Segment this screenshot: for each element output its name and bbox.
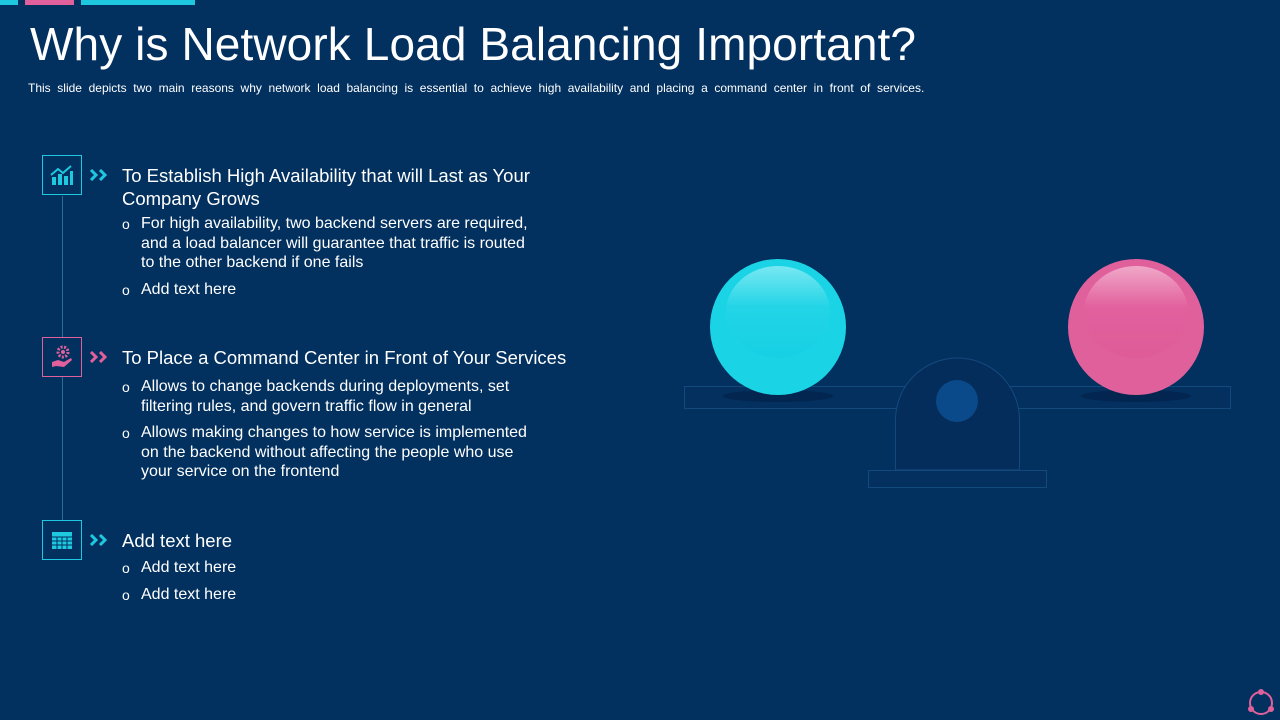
subtitle: This slide depicts two main reasons why network load balancing is essential to achieve high availability and placing a command center in front of services. [28, 81, 924, 95]
icon: growth chart [42, 155, 82, 195]
section 3: Add text here [141, 559, 236, 576]
arrow 1 [90, 169, 107, 181]
section 2 [122, 347, 566, 480]
heading 3: Add text here [122, 530, 232, 551]
section 3: o [122, 586, 130, 602]
icon: calendar [42, 520, 82, 560]
bullets 1: o [122, 216, 130, 232]
icon: hand gear [42, 337, 82, 377]
bullets 1: Add text here [141, 280, 236, 298]
bullets 1: For high availability, two backend servers are required, and a load balancer will guarantee that traffic is routed to the other backend if one fails [141, 215, 528, 271]
bullets 1: o [122, 282, 130, 298]
heading 1: To Establish High Availability that will Last as Your Company Grows [122, 165, 530, 209]
top accent bars [0, 0, 195, 5]
section 1 [122, 165, 530, 298]
section 2: Allows to change backends during deployments, set filtering rules, and govern traffic flow in general [141, 378, 509, 414]
section 3: Add text here [141, 586, 236, 602]
timeline line [62, 196, 63, 520]
bullets 1 [122, 215, 528, 298]
heading 2: To Place a Command Center in Front of Your Services [122, 347, 566, 368]
section 2: o [122, 425, 130, 441]
section 3 [122, 530, 236, 602]
arrow 2 [90, 351, 107, 363]
logo icon bottom right [1248, 689, 1274, 715]
title: Why is Network Load Balancing Important? [30, 18, 916, 70]
section 2: Allows making changes to how service is implemented on the backend without affecting the people who use your service on the frontend [141, 424, 527, 480]
section 2: o [122, 379, 130, 395]
arrow 3 [90, 534, 107, 546]
section 3: o [122, 560, 130, 576]
